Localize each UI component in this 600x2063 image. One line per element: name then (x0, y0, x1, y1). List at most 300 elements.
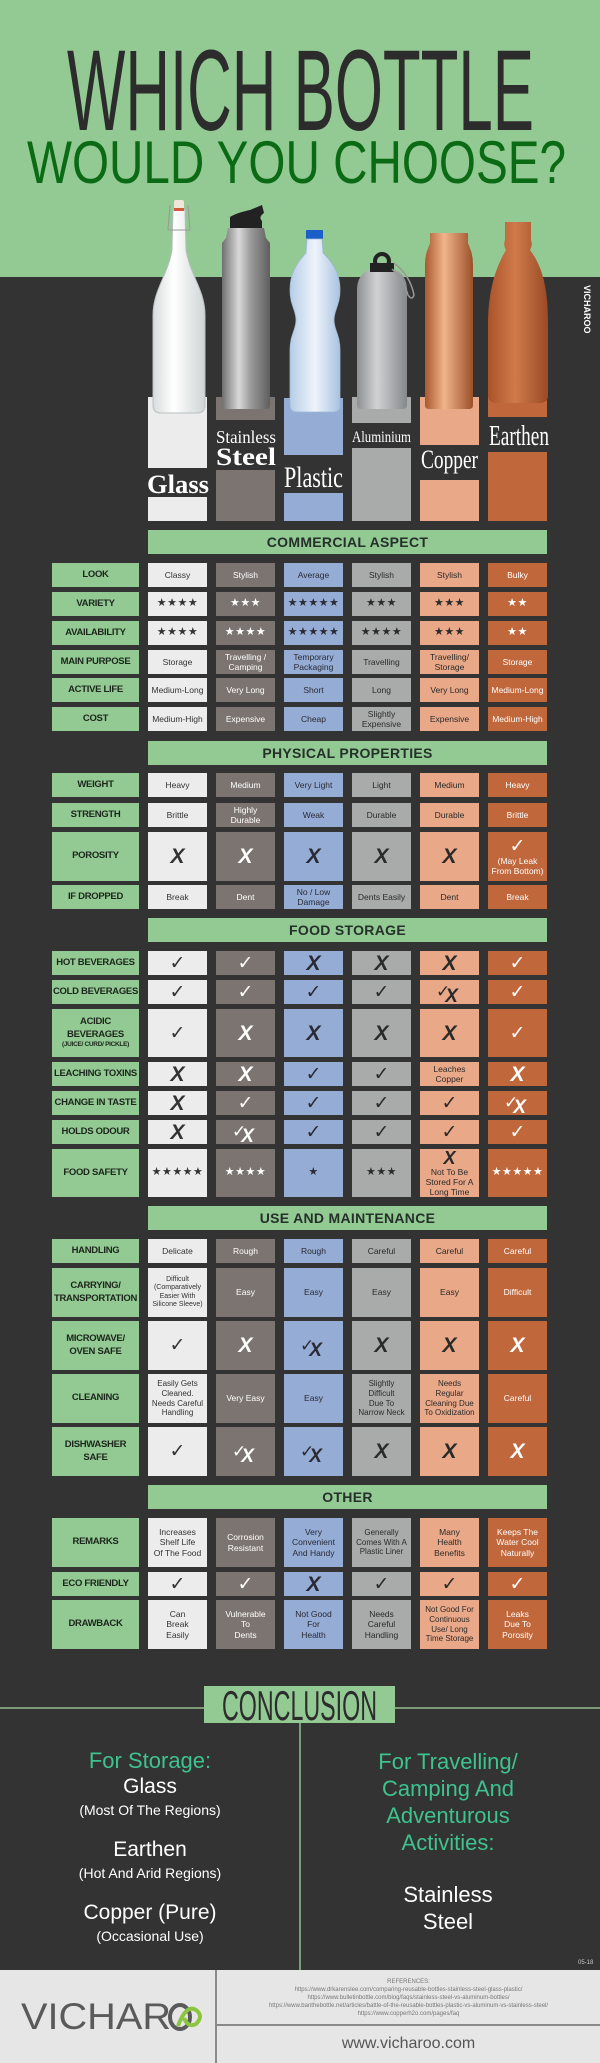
row: food safety: Not To Be (431, 1167, 468, 1177)
row: drawback: To (241, 1619, 250, 1629)
footer (0, 1970, 600, 2063)
row: porosity: X (170, 845, 184, 868)
row: cleaning: Easy (304, 1393, 323, 1403)
row: carrying: Easy (440, 1287, 459, 1297)
row: change in taste: ✓ (306, 1092, 321, 1114)
row: food safety: ★★★★★ (492, 1166, 543, 1178)
row: main purpose: Travelling/ (430, 652, 469, 662)
row: variety: ★★★ (230, 597, 261, 609)
row: active life: Short (303, 685, 324, 695)
bottle labels (147, 421, 549, 499)
row: remarks: Many (439, 1527, 460, 1537)
row: look: LOOK (82, 569, 109, 580)
date code: 05-18 (578, 1960, 593, 1966)
row: look: Stylish (437, 570, 462, 580)
row: cleaning: Difficult (368, 1389, 395, 1398)
row: microwave: ✓ (170, 1334, 185, 1356)
row: holds odour: ✓ (510, 1120, 525, 1142)
row: carrying: Easy (236, 1287, 255, 1297)
row: food safety: ★★★★ (225, 1166, 266, 1178)
row: if dropped: Dents Easily (358, 892, 405, 902)
row: weight: Medium (230, 780, 261, 790)
row: leaching toxins: ✓ (374, 1062, 389, 1084)
row: carrying: Difficult (504, 1287, 531, 1297)
row: main purpose: MAIN PURPOSE (61, 656, 130, 667)
bottle labels: Plastic (284, 461, 343, 494)
row: remarks: And Handy (292, 1548, 335, 1558)
row: cost: Expensive (226, 714, 265, 724)
row: weight: Very Light (295, 780, 332, 790)
row: dishwasher: X (374, 1440, 388, 1463)
section: other (148, 1485, 547, 1509)
row: cost: Expensive (430, 714, 469, 724)
row: if dropped: Break (506, 892, 529, 902)
row: cleaning: CLEANING (72, 1392, 119, 1403)
row: eco friendly: ✓ (510, 1572, 525, 1594)
row: holds odour: ✓ (306, 1120, 321, 1142)
row: weight: Heavy (505, 780, 530, 790)
row: cleaning: Narrow Neck (358, 1408, 405, 1417)
row: acidic beverages: (JUICE/ CURD/ PICKLE) (62, 1041, 129, 1048)
row: cost (52, 707, 547, 731)
row: leaching toxins (52, 1062, 547, 1086)
row: leaching toxins: ✓ (306, 1062, 321, 1084)
row: active life: Very Long (430, 685, 469, 695)
row: variety: ★★★ (366, 597, 397, 609)
row: change in taste: ✓X (504, 1093, 526, 1118)
row: cost: Medium-High (152, 714, 203, 724)
row: remarks: Water Cool (496, 1537, 539, 1547)
row: active life (52, 678, 547, 702)
row: hot beverages: ✓ (238, 952, 253, 974)
row: if dropped: Dent (441, 892, 458, 902)
conclusion: travelling: Activities: (402, 1830, 494, 1855)
row: drawback: Needs (369, 1609, 394, 1619)
row: porosity: X (442, 845, 456, 868)
row: handling: Careful (436, 1246, 463, 1256)
row: cold beverages: ✓ (510, 980, 525, 1002)
row: food safety: ★★★★★ (152, 1166, 203, 1178)
row: cold beverages (52, 980, 547, 1007)
row: porosity: POROSITY (72, 850, 119, 861)
bottle labels: Copper (421, 445, 478, 474)
row: variety: VARIETY (76, 598, 115, 609)
section: physical properties: PHYSICAL PROPERTIES (262, 745, 433, 761)
row: eco friendly: ✓ (374, 1572, 389, 1594)
row: look: Stylish (369, 570, 394, 580)
row: dishwasher (52, 1427, 547, 1476)
row: dishwasher: SAFE (83, 1452, 108, 1462)
section: use and maintenance (148, 1206, 547, 1230)
row: drawback: Porosity (502, 1630, 533, 1640)
row: drawback: Continuous (429, 1615, 470, 1624)
row: if dropped (52, 885, 547, 909)
row: holds odour: ✓ (374, 1120, 389, 1142)
row: active life: Medium-Long (152, 685, 203, 695)
row: remarks: Shelf Life (160, 1537, 195, 1547)
row: cleaning (52, 1374, 547, 1423)
row: carrying: CARRYING/ (70, 1280, 121, 1291)
conclusion: storage: (Most Of The Regions) (79, 1802, 221, 1818)
row: hot beverages (52, 951, 547, 975)
row: porosity: ✓ (510, 835, 525, 857)
row: if dropped: Break (166, 892, 189, 902)
row: change in taste (52, 1091, 547, 1118)
section: use and maintenance: USE AND MAINTENANCE (260, 1210, 435, 1226)
row: if dropped: IF DROPPED (68, 891, 123, 902)
row: hot beverages: X (306, 952, 320, 974)
row: microwave: X (374, 1334, 388, 1357)
conclusion: storage: (Occasional Use) (96, 1928, 204, 1944)
bottles (152, 200, 548, 414)
row: cost: Cheap (301, 714, 326, 724)
row: main purpose: Travelling / (225, 652, 266, 662)
conclusion lines (0, 1707, 600, 1709)
row: cleaning: Regular (435, 1389, 464, 1398)
row: strength: STRENGTH (71, 809, 120, 820)
bottle labels: Glass (147, 470, 209, 499)
section: food storage (148, 918, 547, 942)
row: look: Average (298, 570, 329, 580)
row: drawback: Time Storage (426, 1634, 473, 1643)
row: porosity: X (238, 845, 252, 868)
row: hot beverages: HOT BEVERAGES (56, 957, 135, 968)
row: change in taste: ✓ (374, 1092, 389, 1114)
row: holds odour: ✓ (442, 1120, 457, 1142)
row: availability: ★★★★★ (288, 626, 339, 638)
row: look: Classy (165, 570, 190, 580)
row: availability: AVAILABILITY (65, 627, 126, 638)
row: if dropped: Dent (237, 892, 254, 902)
references (269, 1978, 548, 2017)
row: porosity: X (374, 845, 388, 868)
row: remarks (52, 1518, 547, 1567)
row: drawback: Dents (234, 1630, 257, 1640)
row: strength: Brittle (167, 810, 188, 820)
row: dishwasher: ✓ (170, 1440, 185, 1462)
row: availability: ★★ (507, 626, 528, 638)
row: drawback: Can (170, 1609, 185, 1619)
row: strength: Weak (303, 810, 324, 820)
row: variety: ★★ (507, 597, 528, 609)
row: cold beverages: ✓ (170, 980, 185, 1002)
row: main purpose: Storage (503, 657, 532, 667)
row: active life: Very Long (226, 685, 265, 695)
row: availability: ★★★★ (225, 626, 266, 638)
row: look (52, 563, 547, 587)
conclusion: travelling: Steel (423, 1909, 473, 1934)
row: main purpose: Camping (228, 662, 262, 672)
row: microwave (52, 1321, 547, 1370)
row: remarks: Corrosion (227, 1532, 264, 1542)
row: cleaning: Slightly (369, 1379, 394, 1388)
row: carrying: Easier With (160, 1292, 195, 1300)
row: eco friendly: X (306, 1572, 320, 1596)
row: cleaning: Cleaned. (161, 1389, 194, 1398)
row: change in taste: ✓ (442, 1092, 457, 1114)
row: hot beverages: X (374, 952, 388, 974)
row: cleaning: Easily Gets (157, 1379, 198, 1388)
column blocks and labels (148, 397, 547, 521)
row: remarks: Generally (364, 1528, 399, 1537)
row: food safety: Long Time (430, 1187, 469, 1197)
row: remarks: Health (437, 1537, 462, 1547)
references: https://www.bulletinbottle.com/blog/faqs/stainless-steel-vs-aluminum-bottles/ (307, 1995, 510, 2001)
row: drawback: Not Good For (425, 1605, 474, 1614)
row: handling: Careful (504, 1246, 531, 1256)
row: porosity: (May Leak (498, 856, 537, 866)
row: cost: Expensive (362, 719, 401, 729)
conclusion: storage: Earthen (113, 1838, 187, 1861)
row: leaching toxins: Leaches (433, 1064, 466, 1074)
row: remarks: Comes With A (356, 1538, 407, 1547)
row: cleaning: Needs Careful (152, 1398, 203, 1408)
row: food safety (52, 1148, 547, 1197)
title (27, 27, 566, 196)
row: remarks: Resistant (228, 1542, 263, 1552)
plastic (290, 230, 340, 412)
row: cold beverages: ✓ (374, 980, 389, 1002)
section: physical properties (148, 741, 547, 765)
row: acidic beverages: X (442, 1022, 456, 1044)
row: leaching toxins: LEACHING TOXINS (54, 1068, 137, 1079)
row: handling (52, 1239, 547, 1263)
row: food safety: X (443, 1148, 456, 1168)
row: cleaning: Careful (504, 1393, 531, 1403)
row: eco friendly: ✓ (170, 1572, 185, 1594)
copper (425, 233, 473, 409)
row: active life: ACTIVE LIFE (68, 684, 123, 695)
row: active life: Long (372, 685, 391, 695)
row: variety: ★★★★ (157, 597, 198, 609)
row: main purpose: Packaging (294, 662, 333, 672)
row: food safety: ★ (308, 1166, 319, 1178)
row: availability: ★★★★ (157, 626, 198, 638)
row: drawback: Handling (365, 1630, 398, 1640)
row: microwave: X (442, 1334, 456, 1357)
row: eco friendly: ✓ (238, 1572, 253, 1594)
row: cold beverages: ✓ (306, 980, 321, 1002)
row: carrying (52, 1268, 547, 1317)
row: carrying: Difficult (166, 1276, 189, 1283)
row: microwave: OVEN SAFE (69, 1346, 122, 1356)
row: strength: Durable (231, 815, 260, 825)
row: change in taste: CHANGE IN TASTE (55, 1097, 136, 1108)
row: acidic beverages (52, 1009, 547, 1057)
row: leaching toxins: Copper (436, 1074, 463, 1084)
row: drawback: Easily (166, 1630, 189, 1640)
row: carrying: TRANSPORTATION (54, 1292, 137, 1304)
row: handling: HANDLING (72, 1245, 119, 1256)
row: drawback: Health (301, 1630, 326, 1640)
row: cleaning: Cleaning Due (425, 1398, 474, 1408)
row: drawback: Vulnerable (225, 1609, 266, 1619)
row: remarks: Very (305, 1527, 322, 1537)
row: weight: Heavy (165, 780, 190, 790)
section: commercial aspect: COMMERCIAL ASPECT (267, 534, 428, 550)
section: other: OTHER (322, 1489, 373, 1505)
row: hot beverages: ✓ (510, 952, 525, 974)
row: carrying: Easy (372, 1287, 391, 1297)
row: remarks: Of The Food (154, 1548, 201, 1558)
row: remarks: Convenient (292, 1537, 335, 1547)
row: holds odour: HOLDS ODOUR (62, 1126, 129, 1137)
row: drawback: For (307, 1619, 320, 1629)
bottle labels: Earthen (489, 421, 549, 452)
row: dishwasher: X (442, 1440, 456, 1463)
row: acidic beverages: ACIDIC (80, 1016, 111, 1027)
row: main purpose: Storage (435, 662, 464, 672)
row: dishwasher: ✓X (300, 1442, 322, 1466)
row: remarks: Naturally (501, 1548, 534, 1558)
section: food storage: FOOD STORAGE (289, 922, 406, 938)
row: remarks: Benefits (434, 1548, 465, 1558)
row: drawback (52, 1600, 547, 1649)
row: carrying: (Comparatively (154, 1284, 201, 1291)
conclusion: storage: For Storage: (89, 1748, 211, 1773)
row: dishwasher: DISHWASHER (65, 1439, 126, 1450)
row: hot beverages: ✓ (170, 952, 185, 974)
row: drawback: Not Good (295, 1609, 332, 1619)
row: cold beverages: ✓X (436, 982, 458, 1007)
row: drawback: Careful (368, 1619, 395, 1629)
row: food safety: ★★★ (366, 1166, 397, 1178)
conclusion: travelling: Camping And (382, 1776, 514, 1801)
row: strength: Durable (367, 810, 396, 820)
row: weight: WEIGHT (77, 779, 114, 790)
bottle labels: Stainless (216, 427, 276, 447)
conclusion: travelling (378, 1749, 518, 1934)
row: remarks: Keeps The (497, 1527, 538, 1537)
row: microwave: X (238, 1334, 252, 1357)
row: strength (52, 803, 547, 827)
conclusion: storage: (Hot And Arid Regions) (79, 1865, 221, 1881)
earthen (488, 222, 548, 403)
row: microwave: X (510, 1334, 524, 1357)
row: if dropped: No / Low (297, 887, 330, 897)
row: holds odour: X (170, 1120, 184, 1144)
references: https://www.banthebottle.net/articles/battle-of-the-reusable-bottles-plastic-vs-aluminum-vs-stainless-steel/ (269, 2003, 548, 2009)
row: drawback: Leaks (506, 1609, 529, 1619)
row: availability: ★★★ (434, 626, 465, 638)
row: food safety: Stored For A (426, 1177, 473, 1187)
row: remarks: Increases (159, 1527, 196, 1537)
row: leaching toxins: X (238, 1062, 252, 1086)
row: remarks: Plastic Liner (360, 1547, 403, 1556)
row: eco friendly: ECO FRIENDLY (62, 1578, 129, 1589)
conclusion: travelling: For Travelling/ (378, 1749, 518, 1774)
glass (153, 200, 205, 413)
row: handling: Rough (233, 1246, 258, 1256)
row: change in taste: ✓ (238, 1092, 253, 1114)
row: weight (52, 773, 547, 797)
row: acidic beverages: X (238, 1022, 252, 1044)
row: weight: Medium (434, 780, 465, 790)
row: strength: Durable (435, 810, 464, 820)
aluminium (357, 254, 414, 409)
row: acidic beverages: X (306, 1022, 320, 1044)
row: acidic beverages: BEVERAGES (67, 1029, 124, 1040)
row: cost: Medium-High (492, 714, 543, 724)
section: commercial aspect (148, 530, 547, 554)
row: porosity (52, 832, 547, 881)
row: cleaning: Needs (438, 1379, 461, 1388)
row: cleaning: Handling (162, 1408, 193, 1417)
row: dishwasher: X (510, 1440, 524, 1463)
header background (0, 0, 600, 277)
bottle labels: Aluminium (352, 429, 411, 446)
row: availability: ★★★★ (361, 626, 402, 638)
row: acidic beverages: X (374, 1022, 388, 1044)
row: microwave: MICROWAVE/ (66, 1333, 125, 1344)
row: strength: Brittle (507, 810, 528, 820)
row: main purpose: Temporary (293, 652, 334, 662)
row: holds odour: ✓X (232, 1122, 254, 1147)
row: drawback: Use/ Long (431, 1624, 468, 1634)
row: variety: ★★★ (434, 597, 465, 609)
row: active life: Medium-Long (492, 685, 543, 695)
row: food safety: FOOD SAFETY (63, 1167, 128, 1178)
row: carrying: Easy (304, 1287, 323, 1297)
row: porosity: From Bottom) (492, 866, 543, 876)
row: remarks: REMARKS (73, 1536, 118, 1547)
conclusion: storage: Copper (Pure) (83, 1901, 217, 1924)
conclusion: travelling: Stainless (403, 1882, 493, 1907)
row: look: Bulky (507, 570, 528, 580)
row: strength: Highly (234, 805, 257, 815)
row: cost: Slightly (368, 709, 395, 719)
row: cleaning: To Oxidization (424, 1408, 475, 1417)
row: cold beverages: COLD BEVERAGES (53, 986, 138, 997)
row: drawback: DRAWBACK (68, 1618, 123, 1629)
row: cleaning: Due To (369, 1398, 394, 1408)
row: main purpose: Travelling (363, 657, 400, 667)
website: www.vicharoo.com (342, 2035, 475, 2052)
row: if dropped: Damage (297, 897, 330, 907)
steel (222, 205, 270, 409)
row: leaching toxins: X (170, 1062, 184, 1086)
row: handling: Delicate (162, 1246, 193, 1256)
conclusion: travelling: Adventurous (386, 1803, 510, 1828)
row: dishwasher: ✓X (232, 1442, 254, 1466)
row: availability (52, 621, 547, 645)
row: main purpose: Storage (163, 657, 192, 667)
row: look: Stylish (233, 570, 258, 580)
brand vertical: VICHAROO (582, 285, 592, 334)
row: holds odour (52, 1120, 547, 1147)
row: acidic beverages: ✓ (170, 1022, 185, 1044)
row: leaching toxins: X (510, 1062, 524, 1086)
row: variety: ★★★★★ (288, 597, 339, 609)
row: porosity: X (306, 845, 320, 868)
conclusion: storage: Glass (123, 1775, 177, 1798)
row: drawback: Break (166, 1619, 189, 1629)
row: handling: Rough (301, 1246, 326, 1256)
row: cold beverages: ✓ (238, 980, 253, 1002)
row: variety (52, 592, 547, 616)
references: https://www.copperh2o.com/pages/faq (358, 2011, 459, 2017)
references: https://www.drkarenslee.com/comparing-reusable-bottles-stainless-steel-glass-plastic/ (295, 1987, 522, 1993)
conclusion: storage (79, 1748, 221, 1944)
row: eco friendly: ✓ (442, 1572, 457, 1594)
row: handling: Careful (368, 1246, 395, 1256)
row: weight: Light (372, 780, 391, 790)
row: hot beverages: X (442, 952, 456, 974)
bottle labels: Steel (216, 444, 276, 471)
row: acidic beverages: ✓ (510, 1022, 525, 1044)
row: cost: COST (83, 713, 108, 724)
row: main purpose (52, 650, 547, 674)
